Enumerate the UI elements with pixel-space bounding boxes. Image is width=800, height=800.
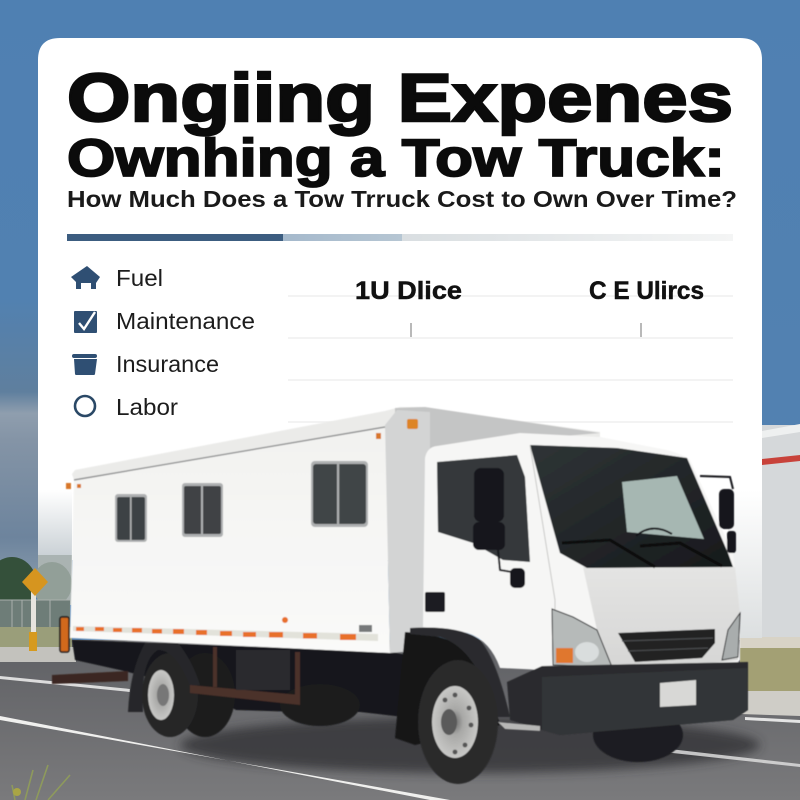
label: fuel: Fuel (116, 265, 163, 291)
truck: step (498, 722, 540, 731)
truck: right mirror (700, 476, 736, 553)
title line 2: Ownhing a Tow Truck: (67, 129, 725, 188)
background: road (0, 640, 800, 800)
icon: road sign (22, 568, 48, 651)
truck: rear lift step (52, 671, 128, 684)
truck: grille (618, 629, 715, 662)
title (67, 60, 737, 212)
truck: wipers (562, 540, 722, 567)
background: building base (735, 637, 800, 648)
background: grass right (735, 648, 800, 692)
progress bar divider (67, 234, 733, 241)
truck: windshield (530, 445, 733, 568)
background: building (730, 424, 800, 637)
truck: license plate (660, 680, 696, 707)
truck: front wheel arch (410, 628, 510, 717)
truck: right headlight (722, 613, 740, 660)
title line 1: Ongiing Expenes (67, 60, 733, 136)
window 1 (115, 494, 147, 542)
legend list (71, 265, 255, 420)
truck: side windows (115, 461, 368, 542)
truck: chassis (72, 640, 430, 720)
truck: door handle (425, 592, 445, 612)
window 2 (182, 483, 223, 537)
road shadow under truck (180, 717, 760, 773)
label: insurance: Insurance (116, 351, 219, 377)
window 3 (311, 461, 368, 527)
truck: amber marker (407, 419, 418, 429)
icon: maintenance checkbox (74, 311, 97, 333)
truck: rear light (60, 617, 69, 652)
truck: rear mudguard (128, 643, 200, 712)
background: pavement right (735, 691, 800, 716)
truck: reflective stripe (73, 617, 378, 641)
truck: left headlight (552, 609, 612, 667)
label: labor: Labor (116, 394, 178, 420)
truck: door window (437, 455, 530, 562)
background: left card fade (38, 490, 72, 560)
truck: inner rear wheel (175, 653, 235, 737)
icon: labor circle (75, 396, 95, 416)
truck: lower dark panel (507, 662, 748, 735)
truck: box end panel (385, 410, 430, 653)
truck: tank (236, 650, 290, 690)
truck: box side (70, 427, 390, 653)
truck: box roof shade (395, 407, 600, 452)
truck: windshield light patch (622, 476, 704, 539)
truck: box roof (72, 407, 600, 480)
truck: side rust rail (190, 647, 300, 705)
table grid lines (288, 296, 733, 422)
truck: middle wheels (280, 684, 360, 726)
icon: insurance box (72, 354, 97, 375)
icon: fuel cap (71, 266, 100, 289)
truck: bumper (542, 668, 748, 735)
panel: white title card (38, 38, 762, 560)
grass tuft (12, 765, 70, 800)
table heading: column 1: 1U Dlice (355, 277, 462, 305)
background: left scenery (0, 555, 76, 662)
truck: steering wheel (636, 528, 672, 536)
truck: front wheel (418, 660, 498, 784)
truck illustration (52, 407, 748, 784)
truck: lower front wheel (593, 708, 683, 762)
truck: box trim line (74, 427, 385, 480)
background: right card fade (728, 490, 762, 638)
truck: left mirror (473, 468, 525, 588)
subtitle: How Much Does a Tow Trruck Cost to Own Over Time? (67, 186, 737, 212)
road markings (0, 676, 800, 800)
truck: rear wheel (142, 653, 198, 737)
truck: door seam (530, 445, 555, 668)
table heading: column 2: C E Ulircs (589, 277, 704, 305)
truck: rear markers (66, 433, 381, 489)
label: maintenance: Maintenance (116, 308, 255, 334)
truck: cab body (423, 433, 740, 670)
truck: wheel well (395, 632, 500, 745)
background: left hazy sky (0, 300, 38, 570)
truck: cab front panel (583, 567, 740, 668)
